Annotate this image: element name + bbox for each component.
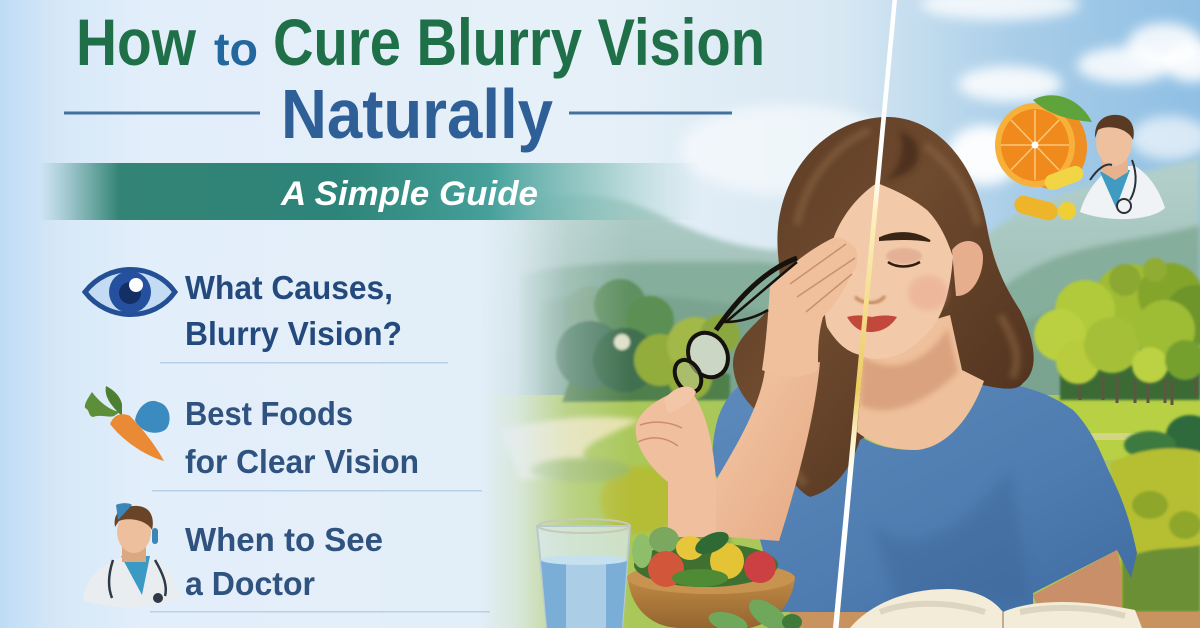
hair part shadow <box>885 130 918 180</box>
landscape scene <box>380 0 1200 628</box>
orange <box>995 103 1087 189</box>
her forearm below the sleeve <box>1033 550 1122 612</box>
hand over eye <box>762 237 857 377</box>
icon: doctor <box>83 503 180 607</box>
meadow path <box>500 417 640 480</box>
basil leaves <box>706 593 802 628</box>
heading text <box>185 521 383 602</box>
divider <box>152 490 482 492</box>
title <box>76 5 765 153</box>
icon: carrot <box>85 386 170 461</box>
heading text <box>185 269 402 352</box>
banner text: A Simple Guide <box>280 175 538 213</box>
face <box>825 183 953 359</box>
heading text: a Doctor <box>185 565 315 602</box>
divider <box>150 611 490 612</box>
heading text: for Clear Vision <box>185 443 419 480</box>
supplements and doctor group <box>995 95 1165 222</box>
open book <box>850 589 1142 628</box>
raised arm <box>716 362 820 541</box>
heading text <box>185 395 419 480</box>
table <box>790 612 1200 628</box>
hand holding glasses <box>636 388 716 537</box>
lips <box>847 315 897 332</box>
doctor <box>1080 115 1165 219</box>
right meadow <box>1060 400 1200 460</box>
left rule <box>64 112 260 114</box>
clouds <box>680 0 1200 195</box>
title line 1 <box>76 5 765 79</box>
icon: eye <box>85 270 175 314</box>
shirt shading <box>870 470 1030 608</box>
salad bowl <box>627 527 795 628</box>
distant hills <box>470 158 1200 430</box>
hair highlights <box>770 130 1017 485</box>
water glass <box>537 519 630 628</box>
title line 2: Naturally <box>281 75 553 153</box>
chin shadow <box>860 328 958 410</box>
banner <box>40 163 700 220</box>
ear <box>952 241 983 296</box>
leaf <box>1033 95 1092 122</box>
item: what causes blurry vision <box>85 269 402 352</box>
mist fade toward the left panel <box>380 165 630 628</box>
heading text: When to See <box>185 521 383 558</box>
heading text: Blurry Vision? <box>185 315 402 352</box>
woman illustration <box>636 117 1137 612</box>
hair <box>733 117 1034 497</box>
closed eye <box>886 248 922 266</box>
title line 1: Cure Blurry Vision <box>273 5 765 79</box>
title line 1: How <box>76 5 197 79</box>
item: best foods <box>85 386 419 480</box>
finger lines <box>790 244 855 312</box>
neck and chest <box>857 315 984 450</box>
item: when to see a doctor <box>83 503 383 607</box>
meadow <box>380 395 1200 628</box>
trees left <box>556 279 740 402</box>
capsules <box>1012 164 1086 222</box>
right rule <box>569 112 732 114</box>
right meadow path <box>1085 433 1145 440</box>
heading text: Best Foods <box>185 395 353 432</box>
eyebrow <box>880 233 930 241</box>
bushes <box>530 415 1200 612</box>
cheek blush <box>908 275 948 311</box>
divider <box>160 362 448 364</box>
shirt <box>712 381 1137 612</box>
nose <box>855 296 885 303</box>
fingers on glasses <box>664 386 696 414</box>
glasses <box>669 258 797 397</box>
split line <box>833 0 897 628</box>
heading text: What Causes, <box>185 269 393 306</box>
finger lines on lower hand <box>638 422 682 446</box>
title line 1: to <box>214 23 258 75</box>
trees right <box>1034 258 1200 405</box>
